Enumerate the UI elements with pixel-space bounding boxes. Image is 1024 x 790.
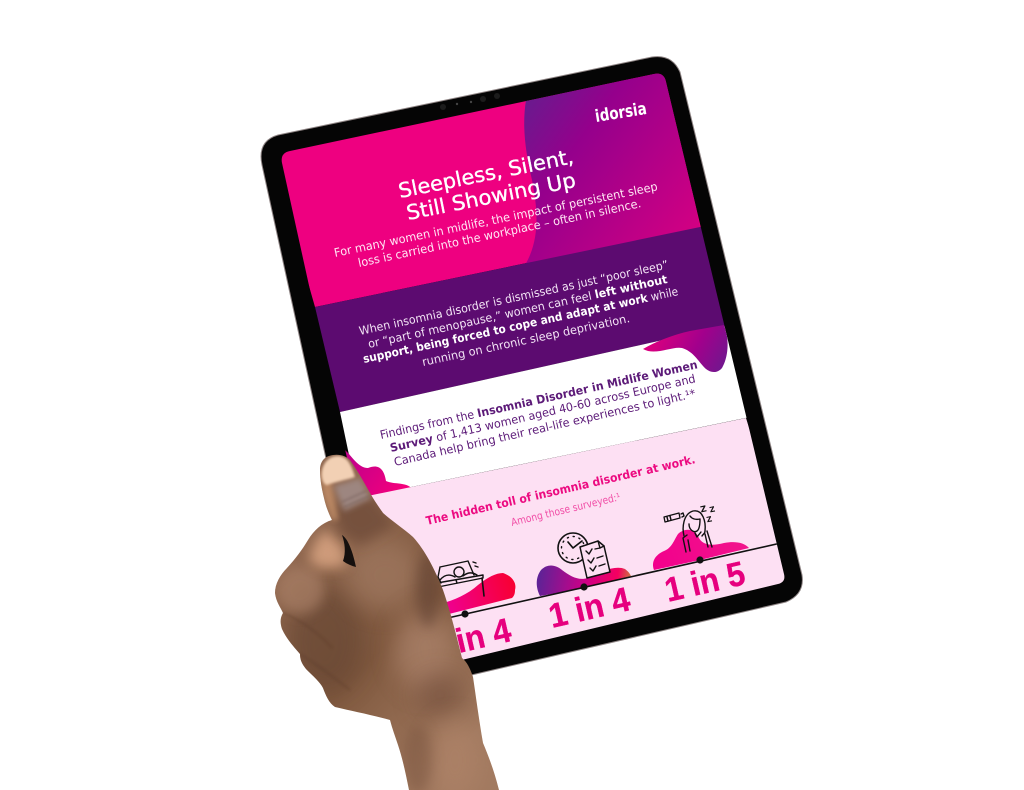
back of hand light <box>347 540 423 610</box>
body text: running on chronic sleep deprivation. <box>421 311 631 369</box>
white background <box>340 325 755 498</box>
white panel <box>340 325 755 505</box>
subtitle: loss is carried into the workplace – often in silence. <box>357 196 642 270</box>
screen <box>282 74 784 660</box>
icon: sleeping at desk <box>437 561 484 596</box>
pink background <box>371 418 784 660</box>
icon: tired woman: Z <box>709 504 716 515</box>
subheading: Among those surveyed:¹ <box>510 491 622 529</box>
blob 1 <box>447 573 516 614</box>
hand base <box>275 455 499 790</box>
title: Sleepless, Silent, <box>396 144 576 203</box>
thumb web highlight <box>308 530 347 569</box>
stat: 1 in 4 left: 1 in 4 <box>426 611 515 667</box>
stat: 1 in 4 middle: 1 in 4 <box>545 580 634 636</box>
hand <box>275 455 499 790</box>
icon: tired woman <box>664 503 718 552</box>
purple panel <box>315 226 730 412</box>
camera dots <box>440 93 500 110</box>
body text: support, being forced to cope and adapt at work while <box>362 284 679 366</box>
icon: tired woman: Z <box>706 514 713 524</box>
finger folds <box>283 613 350 690</box>
heading: The hidden toll of insomnia disorder at work. <box>425 452 697 528</box>
thumb body <box>333 493 395 545</box>
tablet bezel <box>261 57 802 697</box>
header purple shape <box>524 70 700 265</box>
logo: idorsia <box>594 99 648 127</box>
body text: or “part of menopause,” women can feel left without <box>367 272 669 351</box>
header background <box>270 60 705 307</box>
side shadow <box>416 552 440 628</box>
thumb knuckle <box>334 478 371 511</box>
light pink panel <box>371 418 784 660</box>
hand shading <box>276 456 481 790</box>
blob 2 <box>537 565 631 596</box>
blob top right <box>643 325 728 372</box>
tablet <box>261 57 802 697</box>
icon: clock and checklist <box>558 533 610 578</box>
thumb left edge <box>321 470 338 520</box>
survey text: Canada help bring their real-life experiences to light.¹* <box>393 386 697 469</box>
header panel <box>270 60 705 307</box>
stat: 1 in 5: 1 in 5 <box>661 555 749 610</box>
blob 3 <box>653 530 749 570</box>
blob left <box>345 450 410 496</box>
subtitle: For many women in midlife, the impact of persistent sleep <box>333 179 659 260</box>
timeline <box>451 543 777 618</box>
knuckle light <box>276 566 324 614</box>
title <box>398 150 575 220</box>
title: Still Showing Up <box>404 168 578 225</box>
icon: tired woman: Z <box>699 504 708 515</box>
wrist light <box>437 724 484 774</box>
survey text: Survey of 1,413 women aged 40-60 across Europe and <box>389 371 697 455</box>
purple background <box>315 226 730 412</box>
thumb crease <box>342 535 356 567</box>
body text: When insomnia disorder is dismissed as just “poor sleep” <box>358 257 669 338</box>
survey text: Findings from the Insomnia Disorder in Midlife Women <box>379 357 699 442</box>
palm shadow <box>285 585 365 695</box>
thumb nail <box>322 456 355 485</box>
